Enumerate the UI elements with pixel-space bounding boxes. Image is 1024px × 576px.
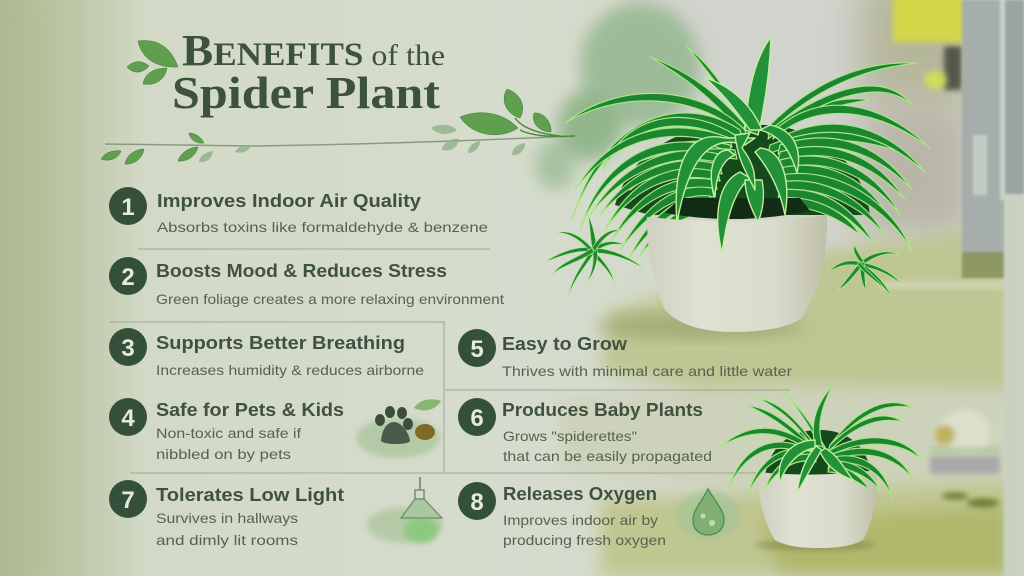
pot shadow: [595, 314, 805, 338]
number badge 6: [458, 398, 496, 436]
baby spider plants: [545, 215, 902, 298]
benefit 7: [109, 477, 443, 548]
small pot: [758, 470, 877, 548]
benefit 6: [458, 398, 712, 464]
pot: [647, 215, 827, 332]
title line two: Spider Plant: [172, 67, 441, 118]
description 4: nibbled on by pets: [156, 446, 291, 462]
number badge 3: [109, 328, 147, 366]
number badge 7: [109, 480, 147, 518]
heading 8: Releases Oxygen: [503, 483, 657, 504]
description 5: Thrives with minimal care and little water: [502, 363, 792, 379]
number badge 8: 8: [470, 489, 484, 516]
description 6: that can be easily propagated: [503, 448, 712, 464]
heading 3: Supports Better Breathing: [156, 332, 405, 353]
benefit 2: [109, 257, 504, 307]
small pot shadow: [755, 539, 875, 551]
small potted spider plant: [720, 385, 922, 551]
heading 4: Safe for Pets & Kids: [156, 399, 344, 420]
description 6: Grows "spiderettes": [503, 428, 637, 444]
title leaves icon: [127, 41, 178, 84]
number badge 1: 1: [121, 194, 135, 221]
soil: [665, 198, 810, 219]
number badge 3: 3: [121, 335, 135, 362]
benefit 8: [458, 482, 740, 548]
description 7: and dimly lit rooms: [156, 532, 298, 548]
description 8: producing fresh oxygen: [503, 532, 666, 548]
number badge 5: [458, 329, 496, 367]
title: [127, 26, 445, 118]
number badge 4: 4: [121, 405, 135, 432]
icon: water drop: [676, 489, 740, 539]
benefit 5: [458, 329, 792, 379]
title line one: BENEFITS of the: [182, 26, 445, 75]
description 3: Increases humidity & reduces airborne: [156, 362, 424, 378]
heading 5: Easy to Grow: [502, 333, 628, 354]
small plant front leaves: [779, 440, 853, 493]
description 1: Absorbs toxins like formaldehyde & benzene: [157, 219, 488, 235]
heading 1: Improves Indoor Air Quality: [157, 190, 422, 211]
heading 2: Boosts Mood & Reduces Stress: [156, 260, 447, 281]
front leaves: [676, 37, 799, 253]
number badge 1: [109, 187, 147, 225]
number badge 5: 5: [470, 336, 484, 363]
description 2: Green foliage creates a more relaxing environment: [156, 291, 504, 307]
number badge 7: 7: [121, 487, 135, 514]
dividers: [110, 249, 790, 473]
number badge 2: 2: [121, 264, 135, 291]
icon: hanging lamp: [367, 477, 443, 543]
number badge 6: 6: [470, 405, 484, 432]
description 8: Improves indoor air by: [503, 512, 658, 528]
small foliage mass: [765, 430, 870, 475]
number badge 8: [458, 482, 496, 520]
benefit 1: [109, 187, 488, 235]
small plant arching leaves: [720, 385, 922, 500]
number badge 2: [109, 257, 147, 295]
benefit 3: [109, 328, 424, 378]
description 7: Survives in hallways: [156, 510, 298, 526]
large potted spider plant: [545, 37, 930, 338]
foliage mass: [615, 124, 870, 215]
description 4: Non-toxic and safe if: [156, 425, 301, 441]
heading 7: Tolerates Low Light: [156, 484, 344, 505]
number badge 4: [109, 398, 147, 436]
icon: paw print: [356, 399, 441, 458]
heading 6: Produces Baby Plants: [502, 399, 703, 420]
vine decoration: [101, 89, 575, 164]
arching striped leaves: [565, 47, 930, 260]
benefit 4: [109, 398, 441, 462]
